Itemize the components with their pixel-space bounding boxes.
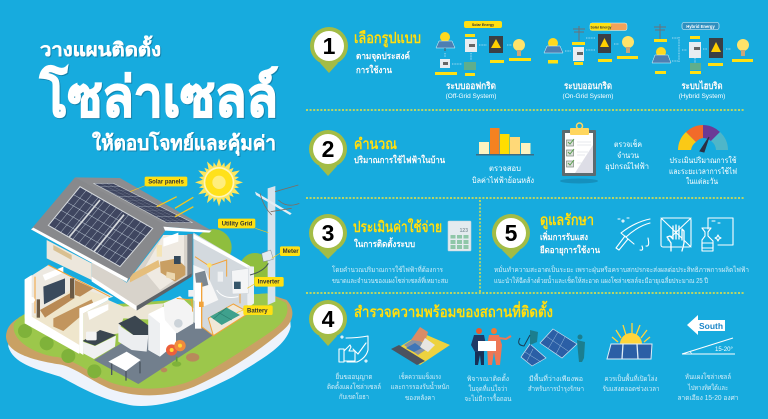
item 4 text: มีพื้นที่ว่างเพียงพอ: [529, 372, 583, 383]
house illustration on island: [6, 158, 300, 406]
icon: spray bottle and window: [702, 218, 733, 251]
title: [39, 35, 278, 156]
kitchen and laundry: [79, 228, 213, 384]
step 5 description: แนะนำให้ฉีดล้างด้วยน้ำและเช็ดให้สะอาด แผงโซล่าเซลล์จะมีอายุเฉลี่ยประมาณ 25 ปี: [494, 274, 708, 285]
step 3 heading: ในการติดตั้งระบบ: [354, 237, 415, 249]
step 3 description: [332, 265, 448, 285]
step 2 pin: 2: [322, 136, 334, 162]
off-grid caption: ระบบออฟกริด: [446, 80, 496, 92]
step 3 heading: [353, 218, 442, 249]
off-grid diagram: Solar Energy: [472, 23, 494, 27]
on-grid diagram: Solar Energy: [591, 26, 612, 30]
gauge caption: [669, 156, 737, 186]
sun rays arrows: [157, 197, 193, 217]
labels: Utility Grid: [222, 221, 253, 227]
step 2 pin: [309, 130, 347, 176]
on-grid caption: ระบบออนกริด: [564, 81, 612, 92]
gauge caption: ประเมินปริมาณการใช้: [670, 156, 737, 165]
labels: Inverter: [258, 280, 280, 286]
item 6 text: [678, 372, 739, 402]
item 5 text: รับแสงตลอดช่วงเวลา: [602, 385, 660, 393]
step 3 heading: ประเมินค่าใช้จ่าย: [353, 218, 442, 236]
title: โซล่าเซลล์: [39, 65, 278, 128]
clipboard caption: ตรวจเช็ค: [614, 139, 642, 149]
item 3 text: ในจุดที่แน่ใจว่า: [468, 384, 508, 393]
step 1 heading: การใช้งาน: [356, 64, 393, 75]
labels: Battery: [247, 308, 268, 314]
item 5 text: [602, 372, 660, 393]
icon: squeegee: [616, 218, 650, 250]
icon: wiping hand: [661, 218, 691, 251]
hybrid caption: [679, 80, 725, 100]
arrow: south direction: South: [699, 321, 723, 331]
upper floor: [47, 233, 193, 311]
step 5 heading: เพิ่มการรับแสง: [540, 230, 588, 242]
icon: solar panel with rising sun: [607, 323, 652, 359]
step 3 pin: 3: [322, 220, 334, 246]
hybrid caption: ระบบไฮบริด: [682, 80, 722, 92]
item 2 text: ของหลังคา: [405, 394, 435, 402]
step 2 heading: ปริมาณการใช้ไฟฟ้าในบ้าน: [354, 154, 446, 165]
icon: calculator: 123: [460, 228, 468, 234]
item 3 text: จะไม่มีการรื้อถอน: [464, 392, 512, 403]
item 6 text: หันแผงโซล่าเซลล์: [685, 372, 731, 381]
step 1 heading: [354, 30, 421, 75]
icon: calculator: [448, 221, 471, 251]
item 1 text: ยื่นขออนุญาต: [336, 372, 373, 381]
item 6 text: ลาดเอียง 15-20 องศา: [678, 394, 739, 402]
utility pole and wires: [250, 185, 299, 305]
step 1 pin: [310, 27, 348, 73]
step 5 description: หมั่นทำความสะอาดเป็นระยะ เพราะฝุ่นหรือคราบสกปรกจะส่งผลต่อประสิทธิภาพการผลิตไฟฟ้า: [494, 265, 749, 274]
step 2 heading: [354, 136, 446, 165]
hybrid caption: (Hybrid System): [679, 93, 725, 100]
icon: clipboard checklist: [560, 123, 598, 184]
arrow: south direction: [687, 315, 725, 335]
hybrid diagram: [652, 22, 753, 74]
step 2 heading: คำนวณ: [354, 136, 397, 153]
living room: [25, 265, 113, 354]
on-grid caption: [563, 81, 613, 100]
step 3 pin: [309, 214, 347, 259]
dotted dividers: [306, 110, 745, 293]
item 3 text: [464, 372, 512, 403]
clipboard caption: [605, 139, 649, 171]
labels: Solar panels: [148, 180, 184, 186]
off-grid caption: (Off-Grid System): [446, 93, 496, 100]
on-grid caption: (On-Grid System): [563, 93, 613, 100]
step 4 heading: สำรวจความพร้อมของสถานที่ติดตั้ง: [354, 300, 553, 321]
item 6 text: ไปทางทิศใต้และ: [687, 383, 728, 392]
item 5 text: ควรเป็นพื้นที่เปิดโล่ง: [604, 372, 658, 383]
bill caption: บิลค่าไฟฟ้าย้อนหลัง: [472, 176, 534, 185]
bill caption: [472, 164, 534, 185]
bar chart: electricity bills: [476, 128, 534, 156]
icon: workers with solar panels: [519, 329, 585, 366]
item 4 text: สำหรับการบำรุงรักษา: [528, 385, 584, 393]
clipboard caption: จำนวน: [617, 151, 639, 160]
step 1 heading: เลือกรูปแบบ: [354, 30, 421, 48]
item 2 text: เช็คความแข็งแรง: [399, 372, 441, 381]
hybrid diagram: Hybrid Energy: [686, 24, 715, 29]
title: ให้ตอบโจทย์และคุ้มค่า: [92, 131, 276, 156]
labels: [130, 177, 300, 315]
icon: engineers with plan: [471, 328, 511, 365]
title: วางแผนติดตั้ง: [40, 35, 161, 61]
item 1 text: กับเขตโยธา: [339, 392, 369, 401]
gauge caption: ในแต่ละวัน: [686, 177, 718, 186]
back wall with wiring: [193, 233, 254, 336]
item 2 text: และการรองรับน้ำหนัก: [390, 380, 450, 391]
background trees: [195, 229, 270, 284]
step 1 heading: ตามจุดประสงค์: [356, 50, 410, 62]
item 1 text: ติดตั้งแผงโซล่าเซลล์: [327, 380, 381, 391]
tilt angle diagram: [682, 338, 735, 354]
step 4 pin: [309, 300, 347, 346]
step 3 description: ขนาดและจำนวนของแผงโซล่าเซลล์ที่เหมาะสม: [332, 276, 448, 285]
icon: isometric house on plot: [391, 327, 450, 365]
item 3 text: พิจารณาติดตั้ง: [467, 372, 509, 383]
labels: Meter: [283, 249, 299, 255]
clipboard caption: อุปกรณ์ไฟฟ้า: [605, 161, 649, 171]
step 5 pin: 5: [505, 220, 518, 246]
gauge caption: และระยะเวลาการใช้ไฟ: [669, 167, 737, 176]
flower: [161, 340, 199, 372]
sun: [195, 158, 243, 206]
gauge: [678, 125, 728, 152]
item 4 text: [528, 372, 584, 393]
step 3 description: โดยคำนวณปริมาณการใช้ไฟฟ้าที่ต้องการ: [332, 265, 443, 274]
step 5 heading: ดูแลรักษา: [540, 212, 594, 230]
item 1 text: [327, 372, 381, 401]
step 5 description: [494, 265, 749, 285]
step 1 pin: 1: [323, 33, 336, 59]
roof with solar panels: [31, 177, 212, 282]
island: [6, 293, 292, 406]
step 5 pin: [492, 214, 530, 259]
off-grid caption: [446, 80, 496, 100]
icon: thumbs up shield: [339, 336, 368, 362]
on-grid diagram: [544, 23, 638, 65]
tilt angle diagram: 15-20°: [715, 345, 733, 353]
step 5 heading: ยืดอายุการใช้งาน: [539, 244, 601, 256]
off-grid diagram: [435, 21, 531, 76]
step 4 pin: 4: [322, 306, 335, 332]
bill caption: ตรวจสอบ: [489, 164, 521, 173]
item 2 text: [390, 372, 450, 402]
step 5 heading: [539, 212, 601, 256]
